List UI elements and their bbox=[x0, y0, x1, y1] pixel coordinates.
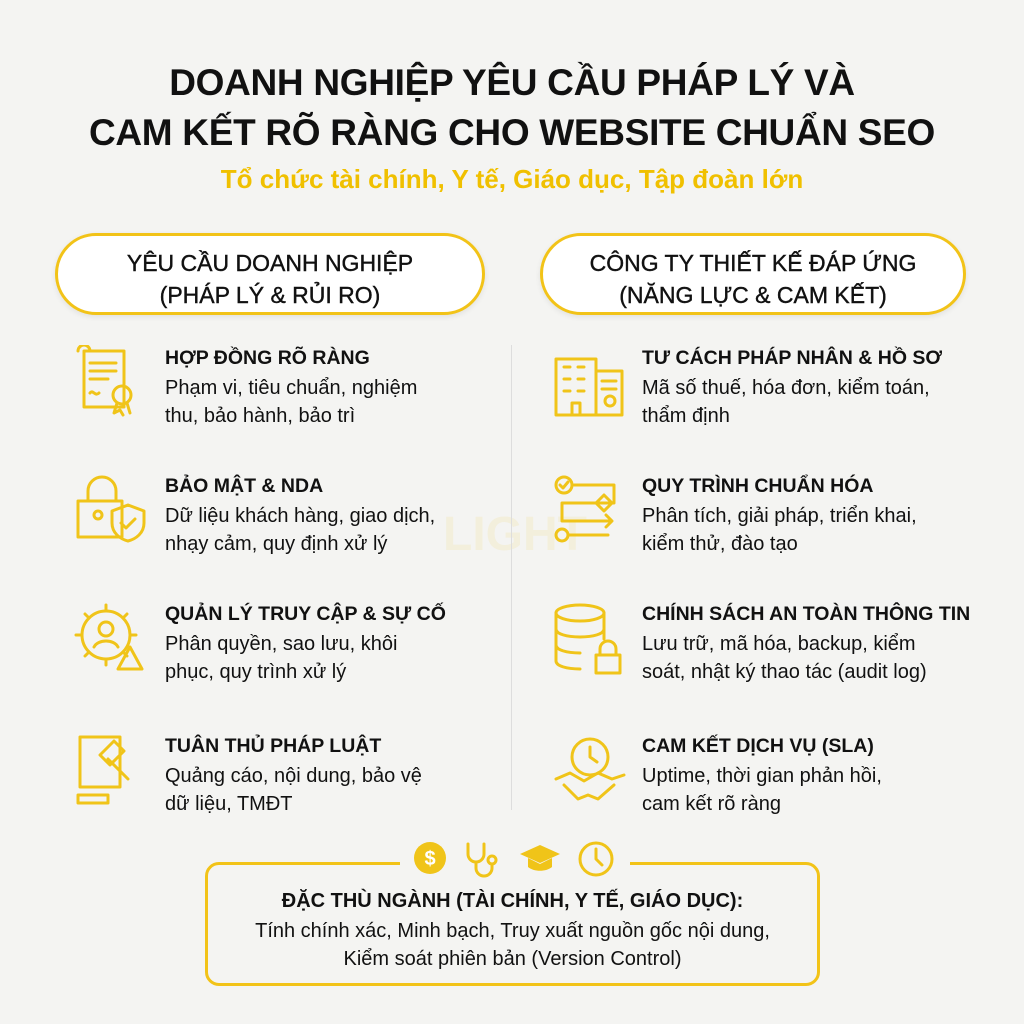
right item 4 bbox=[554, 734, 882, 815]
left item 4: dữ liệu, TMĐT bbox=[165, 793, 292, 815]
pill: left header bbox=[55, 233, 485, 315]
right item 3: CHÍNH SÁCH AN TOÀN THÔNG TIN bbox=[642, 603, 970, 625]
left item 4: TUÂN THỦ PHÁP LUẬT bbox=[165, 735, 381, 757]
right item 3 bbox=[554, 602, 970, 683]
right item 2: Phân tích, giải pháp, triển khai, bbox=[642, 505, 917, 527]
bottom text bbox=[255, 920, 770, 970]
title: DOANH NGHIỆP YÊU CẦU PHÁP LÝ VÀ bbox=[169, 62, 855, 103]
icon: building docs bbox=[554, 358, 624, 416]
right item 4: CAM KẾT DỊCH VỤ (SLA) bbox=[642, 735, 874, 757]
pill: right header: CÔNG TY THIẾT KẾ ĐÁP ỨNG bbox=[590, 250, 916, 276]
pill: left header: YÊU CẦU DOANH NGHIỆP bbox=[127, 250, 413, 276]
left item 1 bbox=[76, 345, 417, 427]
right item 2 bbox=[554, 474, 917, 555]
title: CAM KẾT RÕ RÀNG CHO WEBSITE CHUẨN SEO bbox=[89, 112, 935, 153]
left item 2: BẢO MẬT & NDA bbox=[165, 475, 323, 497]
right item 1 bbox=[554, 346, 942, 427]
right item 2: kiểm thử, đào tạo bbox=[642, 533, 798, 555]
left item 1: Phạm vi, tiêu chuẩn, nghiệm bbox=[165, 377, 417, 399]
pill: right header: (NĂNG LỰC & CAM KẾT) bbox=[619, 282, 887, 308]
left item 4: Quảng cáo, nội dung, bảo vệ bbox=[165, 765, 422, 787]
subtitle: Tổ chức tài chính, Y tế, Giáo dục, Tập đoàn lớn bbox=[221, 164, 803, 194]
left item 2 bbox=[76, 474, 435, 555]
right item 1: TƯ CÁCH PHÁP NHÂN & HỒ SƠ bbox=[642, 347, 942, 369]
bottom icons: $ bbox=[424, 848, 436, 870]
icon: lock shield bbox=[76, 476, 146, 542]
left item 3: Phân quyền, sao lưu, khôi bbox=[165, 633, 397, 655]
bottom icons bbox=[400, 838, 630, 878]
pill: right header bbox=[540, 233, 966, 315]
right item 4: Uptime, thời gian phản hồi, bbox=[642, 765, 882, 787]
left item 1: HỢP ĐỒNG RÕ RÀNG bbox=[165, 347, 370, 369]
right item 1: thẩm định bbox=[642, 405, 730, 427]
right item 3: Lưu trữ, mã hóa, backup, kiểm bbox=[642, 633, 916, 655]
icon: database lock bbox=[554, 604, 622, 674]
left item 4 bbox=[76, 734, 422, 815]
pill: left header: (PHÁP LÝ & RỦI RO) bbox=[160, 282, 380, 308]
right item 4: cam kết rõ ràng bbox=[642, 793, 781, 815]
right item 1: Mã số thuế, hóa đơn, kiểm toán, bbox=[642, 377, 930, 399]
bottom panel: industry specifics bbox=[205, 862, 820, 986]
title bbox=[89, 62, 935, 153]
left item 2: nhạy cảm, quy định xử lý bbox=[165, 533, 387, 555]
right item 2: QUY TRÌNH CHUẨN HÓA bbox=[642, 475, 873, 497]
bottom text: Kiểm soát phiên bản (Version Control) bbox=[344, 948, 681, 970]
left item 3: QUẢN LÝ TRUY CẬP & SỰ CỐ bbox=[165, 603, 446, 625]
icon: handshake clock bbox=[554, 738, 626, 800]
icon: process flow bbox=[554, 476, 616, 542]
icon: gear user warning bbox=[74, 604, 144, 670]
icon: contract bbox=[76, 345, 132, 417]
bottom heading: ĐẶC THÙ NGÀNH (TÀI CHÍNH, Y TẾ, GIÁO DỤC): bbox=[282, 890, 743, 912]
divider bbox=[511, 345, 512, 810]
bottom text: Tính chính xác, Minh bạch, Truy xuất nguồn gốc nội dung, bbox=[255, 920, 770, 942]
left item 2: Dữ liệu khách hàng, giao dịch, bbox=[165, 505, 435, 527]
left item 3: phục, quy trình xử lý bbox=[165, 661, 346, 683]
icon: gavel bbox=[76, 736, 130, 804]
watermark logo: LIGHT bbox=[443, 508, 587, 561]
left item 3 bbox=[74, 602, 446, 683]
left item 1: thu, bảo hành, bảo trì bbox=[165, 405, 355, 427]
right item 3: soát, nhật ký thao tác (audit log) bbox=[642, 661, 927, 683]
